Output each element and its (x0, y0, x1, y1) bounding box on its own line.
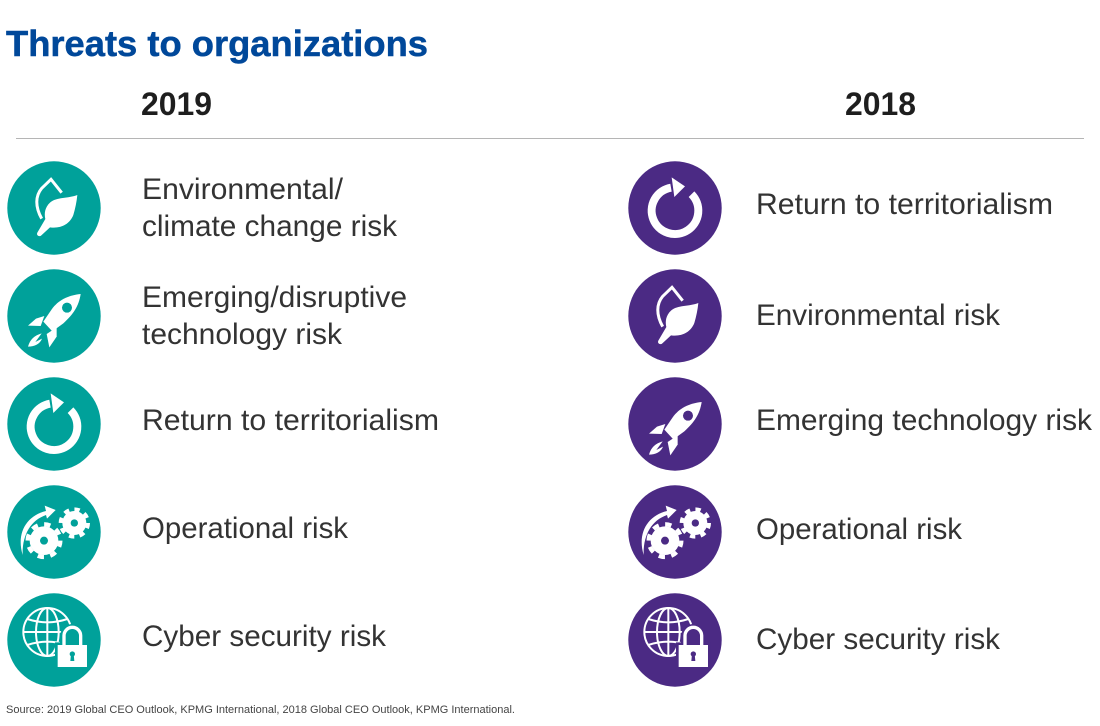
2019 rank 4 icon: gears (7, 485, 101, 579)
2018 rank 2 icon: leaf (628, 269, 722, 363)
2019 rank 1 label: Environmental/ (142, 173, 344, 206)
2019 rank 2 label: Emerging/disruptive (142, 281, 407, 314)
2018 rank 4 icon: gears (628, 485, 722, 579)
2018 rank 4 label: Operational risk (756, 513, 963, 546)
2019 rank 1 label: climate change risk (142, 210, 398, 243)
2019 rank 5 label: Cyber security risk (142, 620, 387, 653)
title: Threats to organizations (6, 23, 428, 64)
2019 rank 2 icon: rocket (7, 269, 101, 363)
2018 rank 1 icon: circular arrow (628, 161, 722, 255)
2019 rank 2 label: technology risk (142, 318, 343, 351)
source note: Source: 2019 Global CEO Outlook, KPMG International, 2018 Global CEO Outlook, KPMG International. (6, 704, 515, 716)
2019 column (7, 161, 439, 687)
2018 rank 3 label: Emerging technology risk (756, 404, 1093, 437)
2019 rank 1 icon: leaf (7, 161, 101, 255)
2019 rank 4 label: Operational risk (142, 512, 349, 545)
2018 rank 3 icon: rocket (628, 377, 722, 471)
2019 rank 3 label: Return to territorialism (142, 404, 439, 437)
2018 rank 1 label: Return to territorialism (756, 188, 1053, 221)
2019 rank 3 icon: circular arrow (7, 377, 101, 471)
2018 rank 5 icon: globe and padlock (628, 593, 722, 687)
2018 rank 5 label: Cyber security risk (756, 623, 1001, 656)
column heading: 2019: 2019 (141, 86, 212, 122)
2018 column (628, 161, 1093, 687)
2019 rank 5 icon: globe and padlock (7, 593, 101, 687)
column heading: 2018: 2018 (845, 86, 916, 122)
2018 rank 2 label: Environmental risk (756, 299, 1001, 332)
